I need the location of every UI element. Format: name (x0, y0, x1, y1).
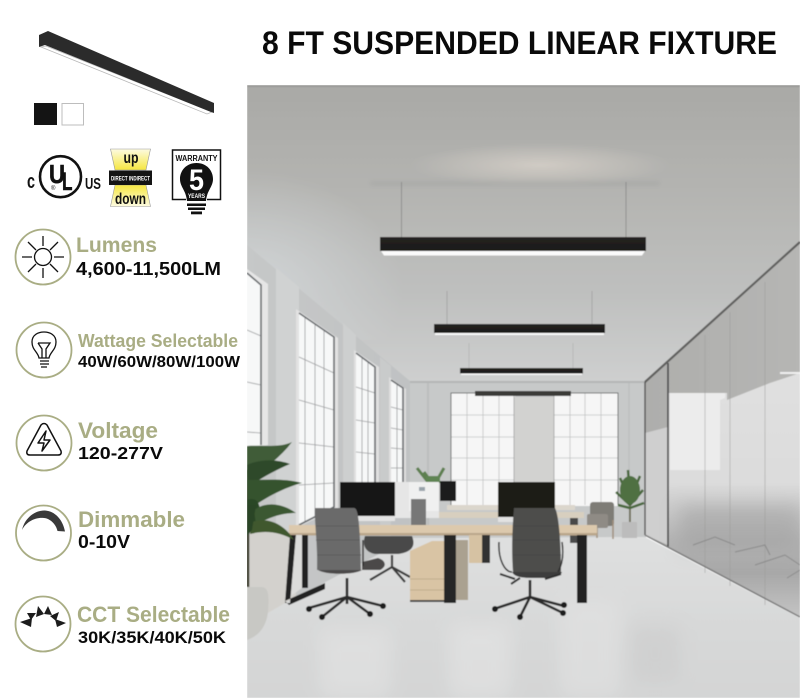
icon: five year warranty bulb: YEARS (188, 193, 205, 200)
left plant (247, 442, 302, 587)
icon: high voltage triangle (16, 416, 72, 470)
icon: half sun rays (16, 596, 70, 652)
ceiling lamp 2 (434, 291, 605, 335)
ceiling lamp 4 (475, 391, 571, 396)
right plant and armchair (587, 470, 644, 539)
icon: up and down direct indirect light badge: up (124, 150, 139, 167)
icon: light bulb (16, 322, 72, 378)
spec: CCT selectable: CCT Selectable (77, 602, 230, 627)
icon: cULus certification: ® (51, 185, 56, 192)
icon: cULus certification: c (27, 171, 35, 193)
wall windows (247, 269, 406, 528)
spec: CCT selectable (16, 596, 230, 652)
icon: up and down direct indirect light badge: DIRECT INDIRECT (111, 176, 150, 182)
chair reflections (693, 537, 800, 578)
spec: voltage: 120-277V (78, 443, 163, 463)
glass partition (645, 242, 800, 617)
spec: wattage selectable: Wattage Selectable (78, 331, 238, 351)
spec: wattage selectable: 40W/60W/80W/100W (78, 354, 240, 371)
icon: up and down direct indirect light badge: down (115, 191, 146, 208)
icon: cULus certification (27, 156, 101, 197)
back windows (451, 393, 618, 506)
icon: five year warranty bulb: 5 (189, 164, 204, 197)
middle chair (364, 536, 413, 582)
spec: lumens: Lumens (76, 234, 157, 257)
front right chair (492, 508, 567, 620)
panel: office photo scene (247, 85, 800, 698)
spec: CCT selectable: 30K/35K/40K/50K (78, 628, 227, 647)
plant pot (247, 587, 268, 640)
spec: dimmable: Dimmable (78, 507, 185, 532)
front left chair (306, 508, 386, 620)
icon: dimmer arc (16, 506, 71, 560)
spec: dimmable: 0-10V (78, 532, 130, 552)
floor (247, 537, 800, 698)
drawer unit (410, 541, 444, 602)
colour swatch: white (62, 104, 84, 125)
ceiling (247, 85, 800, 385)
spec: lumens (16, 230, 221, 284)
icon: five year warranty bulb (172, 150, 220, 216)
icon: cULus certification: L (62, 168, 72, 196)
icon: up and down direct indirect light badge (109, 149, 152, 208)
spec: wattage selectable (16, 322, 240, 378)
title: 8 FT SUSPENDED LINEAR FIXTURE (262, 25, 777, 61)
icon: cULus certification: US (85, 176, 101, 193)
front desk (285, 525, 597, 605)
spec: lumens: 4,600-11,500LM (76, 259, 221, 279)
icon: five year warranty bulb: WARRANTY (176, 154, 218, 163)
colour swatch: black (34, 103, 57, 125)
ceiling lamp 3 (460, 343, 583, 375)
floor reflections (337, 640, 498, 686)
back desks (417, 468, 584, 543)
monitors (340, 481, 555, 525)
icon: sun (16, 230, 70, 284)
back wall (410, 381, 646, 541)
spec: voltage: Voltage (78, 418, 158, 443)
ceiling lamp 1 (380, 182, 646, 256)
spec: dimmable (16, 506, 185, 560)
product image: linear fixture (39, 31, 214, 114)
icon: cULus certification: U (49, 159, 65, 189)
left wall (247, 245, 410, 625)
spec: voltage (16, 416, 163, 470)
